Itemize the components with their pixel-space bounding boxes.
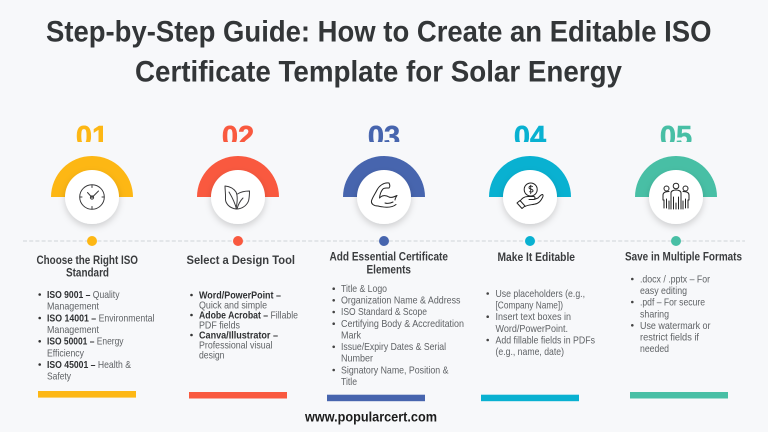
bar 1: [38, 391, 136, 398]
list: certificate elements: Issue/Expiry Dates & Serial: [341, 342, 446, 353]
list: editable tips: [486, 289, 595, 358]
bar 4: [481, 395, 579, 401]
list: certificate elements: Mark: [341, 330, 362, 342]
bar 3: [327, 395, 425, 401]
panel: step 3: [327, 121, 464, 401]
list: design tools: [190, 290, 298, 362]
list: design tools: Canva/Illustrator –: [199, 330, 278, 342]
list: editable tips: Word/PowerPoint.: [496, 324, 568, 335]
icon: hand holding coin: [517, 183, 543, 208]
heading 1: Choose the Right ISO: [36, 254, 138, 267]
icon: leaves: [225, 186, 250, 209]
white icon circle 3: [357, 170, 411, 224]
semicircle arch 4: [489, 156, 571, 197]
list: editable tips: [Company Name]): [496, 301, 563, 312]
panel: step 4: [481, 121, 595, 401]
white icon circle 4: [503, 170, 557, 224]
list: design tools: Professional visual: [199, 340, 272, 352]
list: editable tips: Use placeholders (e.g.,: [496, 289, 585, 300]
list: ISO standards: [38, 290, 154, 383]
icon: group of people: [663, 183, 689, 209]
list: design tools: PDF fields: [199, 320, 240, 332]
heading 1: [36, 254, 138, 280]
number 01: 01: [76, 121, 108, 153]
list: certificate elements: ISO Standard & Scope: [341, 307, 427, 318]
panel: step 2: [186, 121, 298, 398]
heading 5: Save in Multiple Formats: [625, 250, 742, 264]
heading 3: [330, 250, 448, 276]
list: file formats: easy editing: [640, 286, 687, 297]
list: certificate elements: Number: [341, 354, 374, 365]
bar 5: [630, 392, 728, 398]
heading 1: Standard: [66, 266, 109, 280]
footer website: www.popularcert.com: [304, 410, 437, 424]
list: editable tips: (e.g., name, date): [496, 347, 564, 358]
title: [46, 16, 712, 89]
icon: flexed arm: [371, 183, 397, 207]
number 02: 02: [222, 121, 254, 153]
list: file formats: Use watermark or: [640, 321, 711, 332]
number 05: 05: [660, 121, 692, 153]
list: file formats: [631, 274, 711, 355]
white icon circle 1: [65, 170, 119, 224]
list: editable tips: Add fillable fields in PDFs: [496, 336, 595, 346]
panel: step 5: [625, 121, 742, 398]
bar 2: [189, 392, 287, 398]
semicircle arch 2: [197, 156, 279, 197]
list: design tools: Word/PowerPoint –: [199, 290, 281, 302]
list: file formats: restrict fields if: [640, 333, 699, 344]
list: certificate elements: Certifying Body & Accreditation: [341, 319, 464, 330]
title: Certificate Template for Solar Energy: [135, 56, 623, 89]
timeline dot 2: [233, 236, 243, 246]
semicircle arch 3: [343, 156, 425, 197]
list: file formats: .pdf – For secure: [640, 298, 705, 309]
title: Step-by-Step Guide: How to Create an Editable ISO: [46, 16, 712, 49]
list: certificate elements: Title: [341, 377, 357, 388]
timeline dot 1: [87, 236, 97, 246]
heading 3: Elements: [366, 264, 411, 276]
number 03: 03: [368, 121, 400, 153]
list: ISO standards: Management: [47, 325, 99, 336]
list: ISO standards: ISO 14001 – Environmental: [47, 313, 154, 324]
icon: clock: [80, 185, 104, 209]
list: design tools: design: [199, 350, 224, 362]
list: ISO standards: ISO 45001 – Health &: [47, 360, 131, 371]
timeline dot 4: [525, 236, 535, 246]
heading 4: Make It Editable: [498, 251, 575, 264]
timeline dot 3: [379, 236, 389, 246]
heading 2: Select a Design Tool: [186, 254, 295, 267]
list: ISO standards: Management: [47, 302, 99, 313]
panel: step 1: [36, 121, 154, 398]
list: design tools: Adobe Acrobat – Fillable: [199, 310, 298, 322]
white icon circle 2: [211, 170, 265, 224]
list: editable tips: Insert text boxes in: [496, 312, 571, 323]
timeline dot 5: [671, 236, 681, 246]
list: certificate elements: [332, 284, 464, 388]
list: file formats: .docx / .pptx – For: [640, 274, 711, 286]
semicircle arch 5: [635, 156, 717, 197]
list: certificate elements: Organization Name & Address: [341, 296, 460, 307]
list: file formats: sharing: [640, 309, 669, 320]
list: ISO standards: Safety: [47, 372, 72, 383]
list: certificate elements: Signatory Name, Position &: [341, 365, 449, 376]
list: ISO standards: ISO 50001 – Energy: [47, 337, 124, 348]
list: design tools: Quick and simple: [199, 300, 267, 312]
list: file formats: needed: [640, 344, 669, 355]
semicircle arch 1: [51, 156, 133, 197]
list: ISO standards: ISO 9001 – Quality: [47, 290, 120, 301]
list: certificate elements: Title & Logo: [341, 284, 387, 295]
list: ISO standards: Efficiency: [47, 348, 85, 359]
number 04: 04: [514, 121, 546, 153]
heading 3: Add Essential Certificate: [330, 250, 448, 264]
white icon circle 5: [649, 170, 703, 224]
